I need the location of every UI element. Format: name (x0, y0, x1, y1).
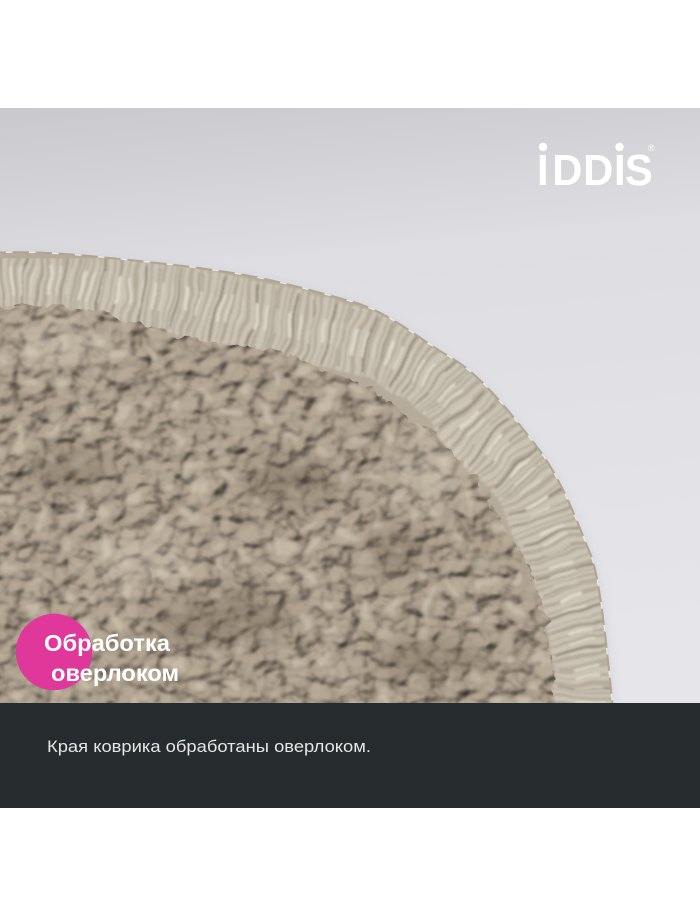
infographic canvas (0, 108, 700, 808)
badge heading (44, 630, 179, 686)
product photo: rug corner on light surface (0, 108, 700, 730)
pink circle badge (16, 614, 92, 690)
rug overlock border (0, 252, 613, 710)
brand logo: IDDIS: ® (648, 143, 655, 153)
pile highlights (0, 323, 468, 586)
caption text: Края коврика обработаны оверлоком. (47, 737, 371, 756)
rug shadow (577, 520, 614, 702)
badge heading: Обработка (44, 630, 171, 656)
brand logo: IDDIS: IDDIS (537, 146, 653, 195)
badge heading: оверлоком (51, 660, 179, 686)
fluffy pile (0, 303, 556, 703)
dark caption bar (0, 703, 700, 808)
pile tufts (0, 306, 556, 703)
pile shadow pockets (25, 450, 485, 680)
